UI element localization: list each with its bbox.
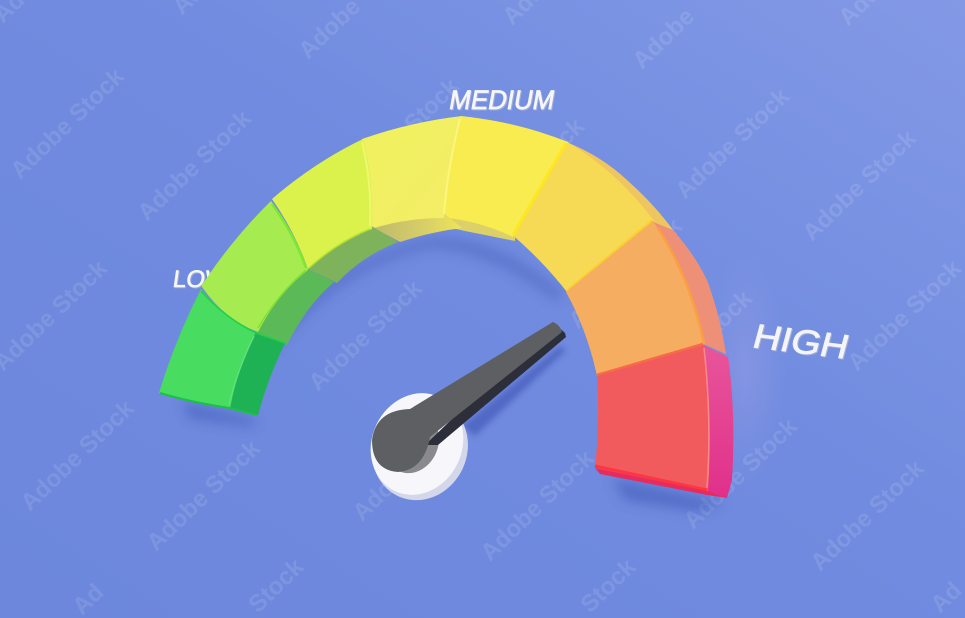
watermarks: Stock <box>575 553 642 618</box>
watermarks: Adobe Stock <box>633 285 758 406</box>
watermarks: Adobe Stock <box>5 63 130 184</box>
segment: yellow with inner wall <box>438 116 568 241</box>
label: MEDIUM: MEDIUM <box>448 85 558 116</box>
white base disc <box>355 382 485 516</box>
needle shadow <box>462 346 566 436</box>
watermarks: Adobe Stock <box>805 455 930 576</box>
watermarks: Adobe Stock <box>465 113 590 234</box>
gauge dial <box>354 322 566 516</box>
label: MEDIUM: MEDIUM <box>447 84 557 115</box>
segment: pale yellow with inner wall <box>362 116 462 242</box>
gauge arc <box>159 116 733 498</box>
segment: red with side <box>595 345 733 498</box>
watermarks: Adobe Stock <box>563 213 688 334</box>
needle pivot shadow <box>375 404 449 482</box>
label: LOW: LOW <box>171 266 230 293</box>
watermarks: Adobe Stock <box>15 395 140 516</box>
segment: yellow-green with inner wall <box>272 139 398 283</box>
segment: green with inner wall <box>159 289 285 415</box>
watermarks: Adobe Stock <box>303 275 428 396</box>
segment: gold with side <box>511 141 673 292</box>
watermarks: Adobe Stock <box>141 435 266 556</box>
segment: orange with side <box>566 221 726 376</box>
watermarks: Adobe Stock <box>347 405 472 526</box>
watermarks: Adobe Stock <box>340 73 465 194</box>
watermarks: Adobe Stock <box>132 105 257 226</box>
watermarks: Adobe Stock <box>670 83 795 204</box>
label: HIGH: HIGH <box>749 318 853 366</box>
watermarks: Adobe Stock <box>842 255 965 376</box>
watermarks: Adobe Stock <box>475 445 600 566</box>
segment: lime with inner wall <box>202 201 334 345</box>
watermarks: Stock <box>243 553 310 618</box>
label: HIGH: HIGH <box>750 319 854 367</box>
watermarks: Adobe Stock <box>678 413 803 534</box>
needle side <box>425 322 566 445</box>
watermarks: Adobe Stock <box>797 125 922 246</box>
watermarks: Adobe <box>627 3 700 74</box>
label: LOW: LOW <box>172 267 231 294</box>
shadows under gauge <box>182 238 725 512</box>
watermarks: Adobe Stock <box>175 233 300 354</box>
right glow <box>703 250 787 490</box>
needle face <box>372 322 562 472</box>
